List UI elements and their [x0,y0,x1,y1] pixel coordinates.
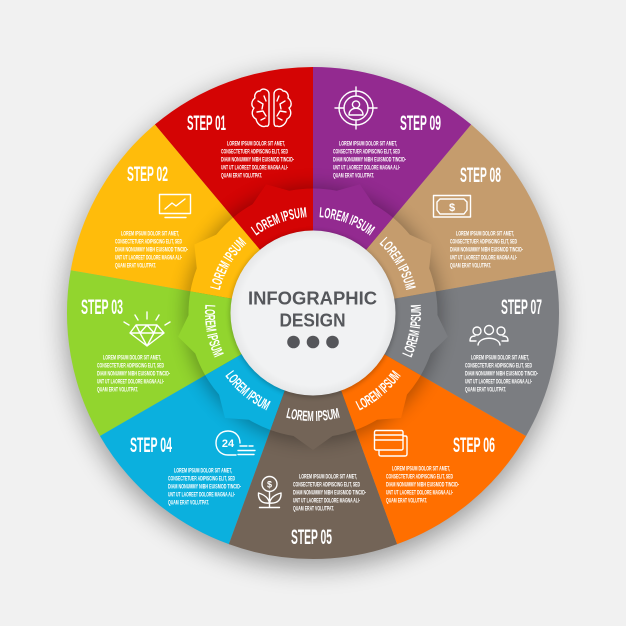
body text: step 08: CONSECTETUER ADIPISCING ELIT, SED [450,238,517,246]
label: step 05 gear: LOREM IPSUM [286,408,340,421]
wedge: step 06 [249,259,536,556]
icon: money plant: $ [267,480,272,490]
label: step 03 gear: LOREM IPSUM [204,304,224,358]
body text: step 06: QUAM ERAT VOLUTPAT. [386,498,427,504]
body text: step 09: LOREM IPSUM DOLOR SIT AMET, [339,140,397,148]
wedge: step 07 [298,230,570,439]
body text: step 01: CONSECTETUER ADIPISCING ELIT, SED [221,148,288,156]
wedge: step 09 [234,53,476,342]
body text: step 04: CONSECTETUER ADIPISCING ELIT, SED [168,476,235,482]
center circle shadow [230,230,396,398]
wheel drop shadow [66,74,560,568]
gear sector: step 04 [192,286,346,445]
body text: step 08: DIAM NONUMMY NIBH EUISMOD TINCID- [450,246,523,254]
body text: step 06 [386,466,459,504]
center circle [230,230,396,396]
body text: step 04: UNT UT LAOREET DOLORE MAGNA ALI- [168,492,235,498]
body text: step 08 [450,230,523,270]
gear sector: step 07 [306,271,455,379]
center dots [287,336,339,348]
icon: money bill [434,196,470,217]
wedge: step 08 [271,117,568,386]
label: step 06 gear: LOREM IPSUM [355,370,401,410]
body text: step 02: LOREM IPSUM DOLOR SIT AMET, [121,230,179,238]
body text: step 05: LOREM IPSUM DOLOR SIT AMET, [299,474,357,480]
body text: step 01: QUAM ERAT VOLUTPAT. [221,172,262,180]
body text: step 05: UNT UT LAOREET DOLORE MAGNA ALI- [293,498,360,504]
icon: 24 hours: 24 [222,438,235,450]
label: step 09 gear: LOREM IPSUM [320,207,376,236]
icon: credit cards [374,430,407,456]
step 04 title: STEP 04 [130,434,172,457]
body text: step 03: LOREM IPSUM DOLOR SIT AMET, [103,354,161,362]
body text: step 05 [293,474,366,512]
step titles: STEP 05 [291,526,332,549]
step titles: STEP 02 [127,163,168,186]
body text: step 07 [465,354,538,394]
body text: step 09: CONSECTETUER ADIPISCING ELIT, SED [333,148,400,156]
wedge: step 04 [90,259,377,556]
label: step 04 gear: LOREM IPSUM [225,370,271,410]
body text: step 01: UNT UT LAOREET DOLORE MAGNA ALI- [221,164,288,172]
body text: step 05: DIAM NONUMMY NIBH EUISMOD TINCID- [293,490,366,496]
step titles [81,112,542,549]
gear sector: step 06 [280,286,434,445]
icon: people group [470,326,508,345]
body text: step 06: DIAM NONUMMY NIBH EUISMOD TINCID- [386,482,459,488]
body text: step 06: CONSECTETUER ADIPISCING ELIT, SED [386,474,453,480]
body text: step 07: QUAM ERAT VOLUTPAT. [465,386,506,394]
body text: step 02 [115,230,188,270]
step titles: STEP 01 [187,112,226,135]
body text: step 09: UNT UT LAOREET DOLORE MAGNA ALI- [333,164,400,172]
icon: 24 hours [216,431,255,455]
body text: step 02: UNT UT LAOREET DOLORE MAGNA ALI- [115,254,182,262]
center title [248,288,377,330]
body text: step 08: QUAM ERAT VOLUTPAT. [450,262,491,270]
center title: INFOGRAPHIC [248,288,377,308]
label: step 07 gear: LOREM IPSUM [402,304,422,358]
body text: step 08: UNT UT LAOREET DOLORE MAGNA ALI- [450,254,517,262]
label: step 01 gear: LOREM IPSUM [250,207,307,236]
icon: target person [335,87,377,129]
step titles: STEP 08 [460,164,501,187]
body text: step 02: CONSECTETUER ADIPISCING ELIT, SED [115,238,182,246]
body text: step 04 [168,468,241,506]
body text: step 07: LOREM IPSUM DOLOR SIT AMET, [471,354,529,362]
text: STEP 07 [501,296,542,319]
gear sector: step 09 [273,170,400,328]
body text: step 02: QUAM ERAT VOLUTPAT. [115,262,156,270]
body text: step 03: QUAM ERAT VOLUTPAT. [97,386,138,394]
gear sector: step 08 [292,208,453,350]
wedge: step 02 [58,117,355,386]
body text: step 08: LOREM IPSUM DOLOR SIT AMET, [456,230,514,238]
wedge: step 01 [150,53,392,342]
body text: step 02: DIAM NONUMMY NIBH EUISMOD TINCID- [115,246,188,254]
icon: monitor chart [160,194,190,218]
body text: step 03: CONSECTETUER ADIPISCING ELIT, SED [97,362,164,370]
icon: diamond with rays [124,312,170,346]
body text: step 06: UNT UT LAOREET DOLORE MAGNA ALI- [386,490,453,496]
wedge: step 03 [56,230,328,439]
body text: step 09 [333,140,406,180]
center title: DESIGN [280,310,346,330]
body text: step 04: QUAM ERAT VOLUTPAT. [168,500,209,506]
label: step 02 gear: LOREM IPSUM [210,236,246,290]
wedge: step 05 [229,313,397,559]
icon: money plant [258,476,281,508]
gear sector: step 01 [226,170,353,328]
step titles: STEP 09 [400,112,441,135]
body text: step 09: QUAM ERAT VOLUTPAT. [333,172,374,180]
body text: step 03: UNT UT LAOREET DOLORE MAGNA ALI- [97,378,164,386]
step 06 title: STEP 06 [453,434,495,457]
outer wheel wedges [56,53,570,559]
body text: step 04: DIAM NONUMMY NIBH EUISMOD TINCID- [168,484,241,490]
body text: step 07: DIAM NONUMMY NIBH EUISMOD TINCID- [465,370,538,378]
icon: money bill: $ [449,202,455,214]
body text: step 05: QUAM ERAT VOLUTPAT. [293,506,334,512]
body text: step 04: LOREM IPSUM DOLOR SIT AMET, [174,468,232,474]
label: step 08 gear: LOREM IPSUM [380,236,416,290]
icon: brain [252,89,291,127]
body text: step 01 [221,140,294,180]
gear sector: step 03 [171,271,320,379]
body text: step 09: DIAM NONUMMY NIBH EUISMOD TINCID- [333,156,406,164]
body text: step 01: DIAM NONUMMY NIBH EUISMOD TINCID- [221,156,294,164]
body text: step 05: CONSECTETUER ADIPISCING ELIT, SED [293,482,360,488]
gear shadow [185,186,441,442]
body text: step 07: UNT UT LAOREET DOLORE MAGNA ALI- [465,378,532,386]
gear sector: step 05 [270,313,356,450]
gear labels [204,207,422,421]
step 03 title: STEP 03 [81,296,123,319]
body text: step 06: LOREM IPSUM DOLOR SIT AMET, [392,466,450,472]
body text: step 03 [97,354,170,394]
gear sector: step 02 [173,208,334,350]
body text: step 01: LOREM IPSUM DOLOR SIT AMET, [227,140,285,148]
inner gear [171,170,455,450]
body text: step 07: CONSECTETUER ADIPISCING ELIT, SED [465,362,532,370]
body text: step 03: DIAM NONUMMY NIBH EUISMOD TINCID- [97,370,170,378]
